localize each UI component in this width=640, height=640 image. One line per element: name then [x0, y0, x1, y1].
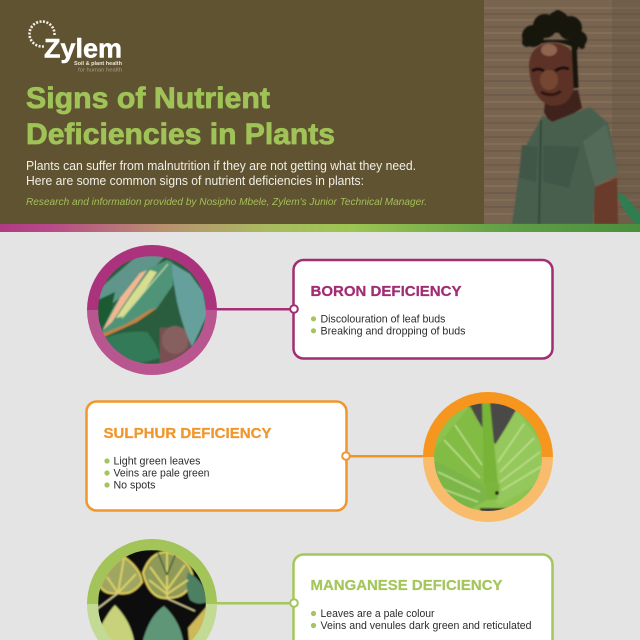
- title: Deficiencies in Plants: [26, 118, 335, 151]
- image circle: boron leaf: [87, 245, 217, 375]
- logo: Zylem: Soil & plant health: [74, 61, 122, 67]
- section: manganese deficiency: [87, 539, 552, 640]
- photo: technical manager: [484, 0, 640, 224]
- bullet list: Discolouration of leaf buds: [320, 314, 446, 326]
- connector: [214, 602, 294, 604]
- bullet list: No spots: [114, 480, 156, 492]
- bullet list: Veins and venules dark green and reticulated: [320, 620, 532, 632]
- bullet list: Veins are pale green: [114, 468, 210, 480]
- logo: Zylem: Zylem: [44, 34, 122, 64]
- shirt: [512, 107, 618, 224]
- heading: BORON DEFICIENCY: [310, 283, 462, 300]
- panel: header: [0, 0, 640, 224]
- heading: MANGANESE DEFICIENCY: [310, 577, 502, 594]
- title: Signs of Nutrient: [26, 82, 270, 115]
- hair: [522, 10, 587, 50]
- card: sulphur: [86, 402, 346, 510]
- section: boron deficiency: [87, 245, 552, 375]
- image circle: manganese leaves: [87, 539, 217, 640]
- intro text: Here are some common signs of nutrient deficiencies in plants:: [26, 173, 364, 188]
- intro text: Plants can suffer from malnutrition if they are not getting what they need.: [26, 158, 416, 173]
- logo: Zylem: for human health: [78, 68, 122, 74]
- neck: [544, 90, 582, 128]
- bullet list: [104, 456, 210, 492]
- connector node: [290, 599, 298, 607]
- section: sulphur deficiency: [86, 392, 553, 522]
- connector: [346, 455, 426, 458]
- intro text: [26, 158, 416, 188]
- card: manganese: [294, 554, 552, 640]
- connector: [214, 308, 294, 310]
- connector node: [290, 305, 298, 313]
- heading: SULPHUR DEFICIENCY: [104, 425, 272, 442]
- image circle: sulphur leaf: [423, 392, 553, 522]
- bullet list: Breaking and dropping of buds: [320, 326, 466, 338]
- bullet list: [311, 314, 466, 338]
- card: boron: [294, 260, 552, 358]
- face: [529, 43, 577, 106]
- gradient bar: [0, 224, 640, 232]
- connector node: [342, 452, 350, 460]
- bullet list: Light green leaves: [114, 456, 201, 468]
- arm: [594, 178, 618, 224]
- logo: Zylem: [30, 22, 122, 74]
- title: [26, 82, 335, 151]
- credit line: Research and information provided by Nosipho Mbele, Zylem's Junior Technical Manager.: [26, 196, 427, 208]
- bullet list: Leaves are a pale colour: [320, 608, 435, 620]
- bullet list: [311, 608, 532, 632]
